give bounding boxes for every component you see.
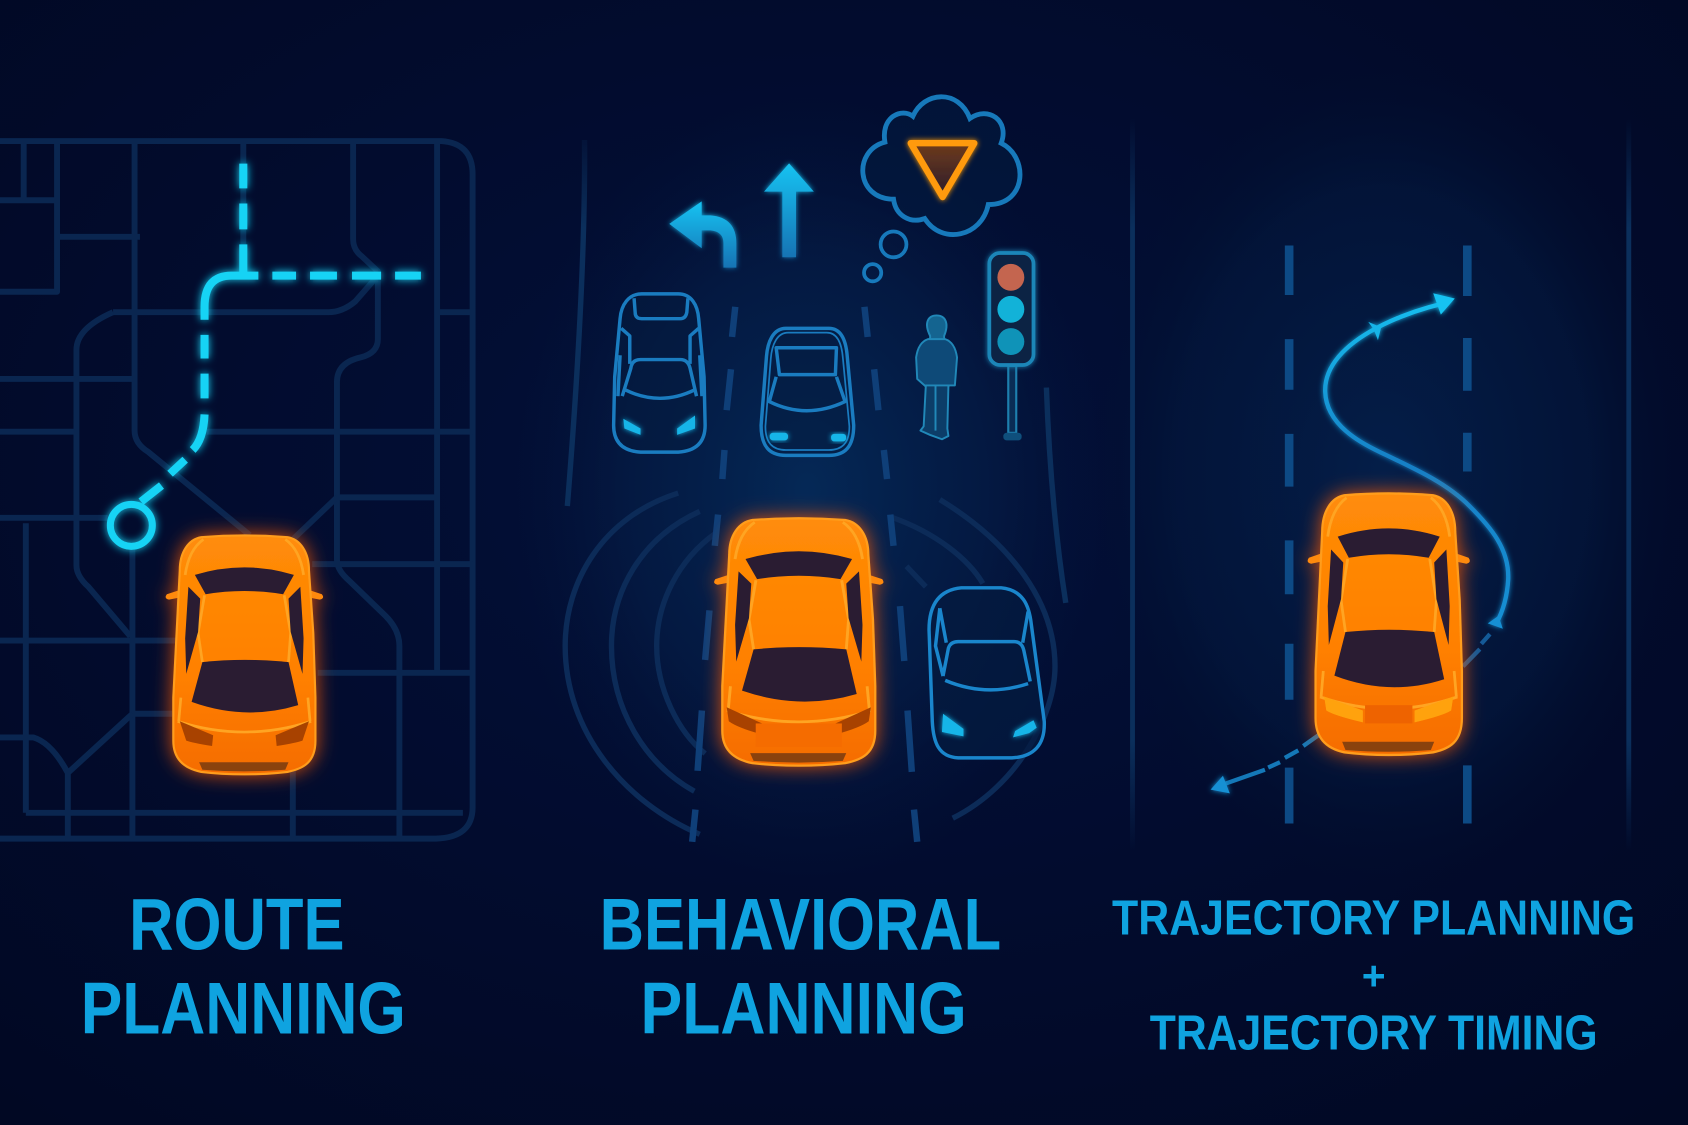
road edges [1133, 118, 1629, 850]
heading: trajectory planning and timing [1112, 890, 1635, 1061]
traffic light [989, 253, 1033, 440]
street map [0, 141, 473, 839]
dashed trajectory continuation [1225, 634, 1490, 784]
thought cloud with yield sign [863, 97, 1020, 281]
heading: route planning [81, 884, 406, 1049]
panel: trajectory planning [1133, 118, 1629, 850]
panel: behavioral planning [565, 97, 1066, 842]
orange car: ego [714, 518, 883, 766]
road edges [567, 140, 1066, 603]
arrow: left turn [669, 201, 736, 268]
blue car: right lane [929, 588, 1044, 758]
heading: behavioral planning: BEHAVIORAL [600, 884, 1001, 966]
heading: trajectory planning and timing: + [1362, 952, 1386, 998]
route start marker [110, 504, 152, 546]
sensor arcs [565, 493, 1055, 834]
arrow: straight [764, 163, 814, 257]
orange car: trajectory [1308, 494, 1470, 755]
arrowhead: rear trajectory [1211, 776, 1230, 793]
blue car: center lane [761, 328, 854, 455]
trajectory curve [1325, 293, 1508, 629]
lane dashes [692, 307, 917, 842]
orange car: route [166, 536, 323, 774]
heading: route planning: ROUTE [129, 884, 344, 966]
pedestrian [916, 315, 957, 439]
blue car: left lane [614, 294, 705, 452]
heading: trajectory planning and timing: TRAJECTORY TIMING [1150, 1006, 1598, 1061]
heading: route planning: PLANNING [81, 967, 406, 1049]
lane dashes [1289, 245, 1467, 824]
heading: behavioral planning: PLANNING [641, 967, 967, 1049]
icon: yield sign [911, 143, 974, 197]
panel: route planning [0, 141, 473, 839]
heading: behavioral planning [600, 884, 1001, 1049]
route path dashed [141, 164, 421, 502]
